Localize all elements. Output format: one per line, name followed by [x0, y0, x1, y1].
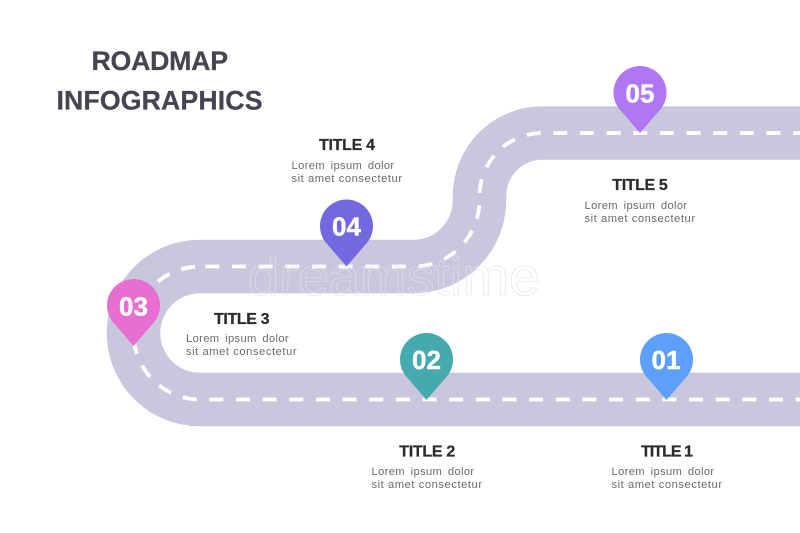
- text block: title 3: sit amet consectetur: [186, 346, 297, 358]
- pin 03: [107, 279, 160, 346]
- text block: title 1: TITLE 1: [641, 444, 693, 461]
- text block: title 1: sit amet consectetur: [612, 479, 723, 491]
- text block: title 5: Lorem ipsum dolor: [584, 200, 688, 212]
- pin 02: [400, 333, 453, 400]
- pin 04: 04: [332, 212, 361, 242]
- pin 04: [320, 200, 373, 266]
- text block: title 4: Lorem ipsum dolor: [292, 160, 394, 172]
- text block: title 3: Lorem ipsum dolor: [186, 333, 289, 345]
- pin 01: 01: [652, 345, 680, 375]
- text block: title 5: sit amet consectetur: [584, 213, 696, 225]
- title: ROADMAP: [92, 46, 228, 76]
- text block: title 4: TITLE 4: [319, 137, 375, 154]
- pin 05: 05: [626, 78, 654, 108]
- title: [56, 46, 262, 116]
- watermark: dreamstime: [248, 247, 540, 307]
- pin 01: [640, 333, 693, 400]
- text block: title 2: TITLE 2: [399, 444, 455, 461]
- text block: title 2: Lorem ipsum dolor: [372, 466, 474, 478]
- text block: title 3: TITLE 3: [214, 311, 270, 328]
- text block: title 2: [372, 444, 483, 491]
- pin 03: 03: [119, 292, 148, 322]
- text block: title 5: [584, 177, 696, 225]
- title: INFOGRAPHICS: [56, 86, 262, 116]
- text block: title 2: sit amet consectetur: [372, 479, 483, 491]
- pin 05: [613, 66, 666, 133]
- road: [134, 133, 800, 400]
- text block: title 5: TITLE 5: [612, 177, 668, 194]
- text block: title 3: [186, 311, 297, 358]
- pin 02: 02: [412, 345, 441, 375]
- text block: title 1: Lorem ipsum dolor: [612, 466, 714, 478]
- text block: title 4: [292, 137, 403, 185]
- text block: title 1: [612, 444, 723, 491]
- text block: title 4: sit amet consectetur: [292, 173, 403, 185]
